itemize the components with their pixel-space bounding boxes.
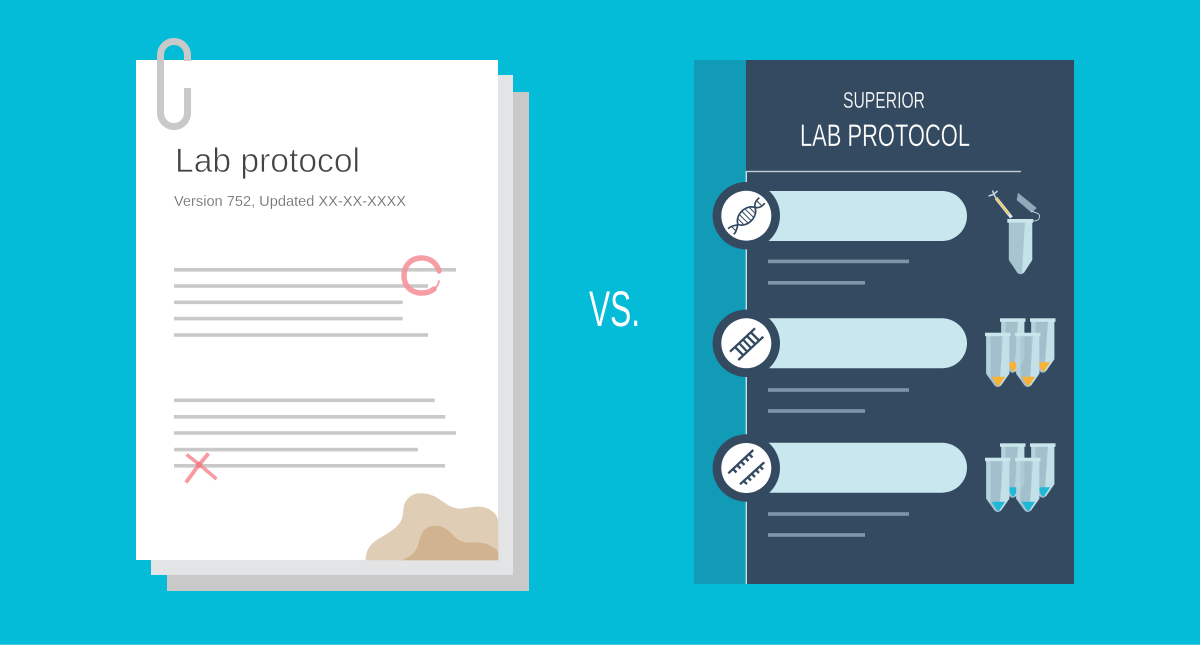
heading: superior: SUPERIOR	[843, 87, 925, 113]
icon: ladder	[713, 310, 780, 377]
tube cap	[1017, 193, 1037, 213]
pill bar	[760, 191, 967, 241]
icon: split ladder	[713, 434, 780, 502]
row 1: DNA step	[713, 182, 1040, 285]
icon: four tubes, blue	[985, 443, 1056, 512]
text lines	[768, 260, 909, 285]
tube body	[1009, 221, 1032, 274]
text lines: first paragraph	[174, 268, 456, 337]
row 3: single strand step	[713, 434, 1056, 537]
text lines: second paragraph	[174, 398, 456, 468]
spine edge line	[746, 171, 747, 584]
coffee stain	[366, 493, 498, 560]
front sheet	[136, 60, 498, 560]
heading divider	[746, 171, 1021, 172]
red pen circle mark	[404, 258, 439, 293]
panel: stack of paper, lab protocol	[136, 42, 529, 591]
heading: lab protocol: LAB PROTOCOL	[800, 117, 970, 153]
row 2: ladder step	[713, 310, 1056, 413]
pill bar	[760, 318, 967, 368]
icon: single tube with pipette	[988, 190, 1040, 274]
heading: Lab protocol: Lab protocol	[175, 142, 360, 180]
vs label: VS.	[589, 281, 640, 337]
red pen cross mark	[186, 454, 216, 482]
document background	[694, 60, 1074, 584]
pipette	[996, 198, 1012, 218]
panel: superior lab protocol document	[694, 60, 1074, 584]
text lines	[768, 512, 909, 537]
text lines	[768, 388, 909, 413]
paperclip	[160, 42, 188, 127]
back sheet	[167, 92, 529, 591]
teal spine	[694, 60, 746, 584]
icon: DNA helix	[713, 182, 780, 249]
pill bar	[760, 443, 967, 493]
version text: Version 752, Updated XX-XX-XXXX	[174, 193, 406, 210]
middle sheet	[151, 75, 513, 575]
icon: four tubes, orange	[985, 318, 1056, 387]
